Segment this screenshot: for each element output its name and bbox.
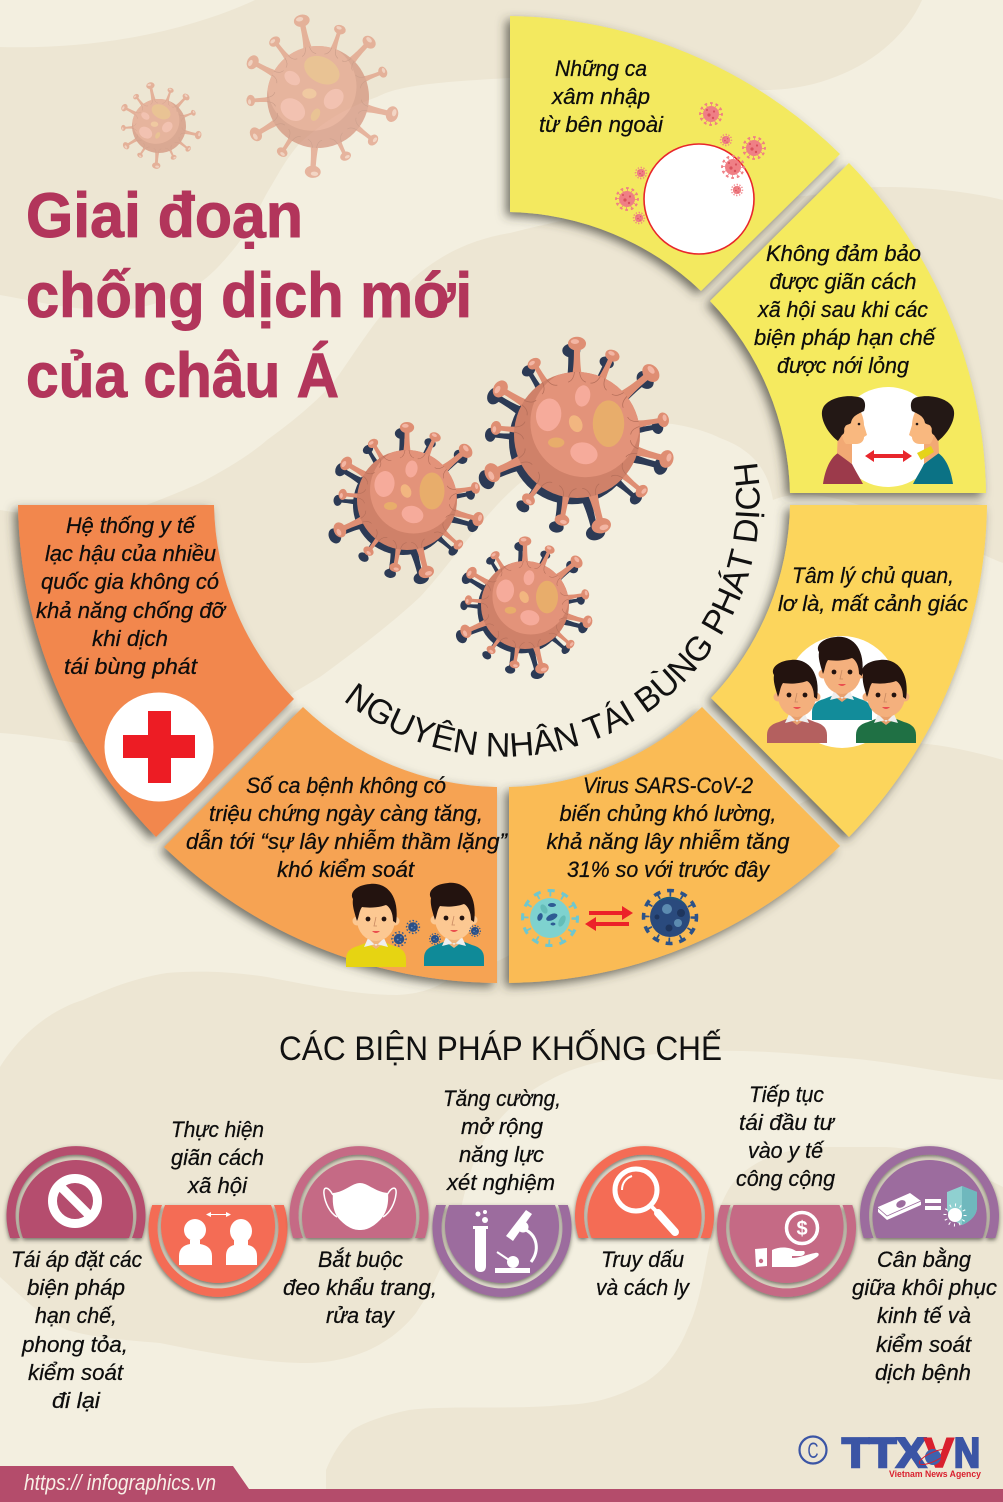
badge: rose bowl [717, 1205, 856, 1297]
text: silent infection: Số ca bệnh không có [246, 773, 446, 798]
text: economy and disease balance: Cân bằng [877, 1247, 972, 1272]
icon: face mask [324, 1183, 396, 1230]
icon: coin above hand: $ [796, 1218, 808, 1240]
text: no social distancing: được nới lỏng [777, 353, 910, 378]
icon: teal virus [522, 890, 578, 946]
panel: no social distancing [710, 163, 986, 493]
text: testing capacity: Tăng cường, [443, 1086, 561, 1111]
icon: group of three people [767, 636, 916, 748]
title: chống dịch mới [26, 261, 472, 331]
text: testing capacity: xét nghiệm [446, 1170, 555, 1195]
text: economy and disease balance: dịch bệnh [875, 1360, 971, 1385]
text: mutation: Virus SARS-CoV-2 [583, 773, 753, 798]
background blob: top wave [0, 0, 922, 310]
text: outdated health systems [36, 513, 227, 679]
measure 2: social distancing [148, 1117, 288, 1297]
text: restrictions: phong tỏa, [21, 1332, 128, 1357]
text: testing capacity [443, 1086, 561, 1195]
icon: money equals shield [878, 1186, 977, 1225]
text: economy and disease balance: giữa khôi phục [852, 1275, 997, 1300]
text: masks and hand washing: đeo khẩu trang, [283, 1275, 437, 1300]
panel: silent infection [164, 707, 509, 983]
text: economy and disease balance [852, 1247, 997, 1385]
background blob: right and lower wave [0, 743, 1003, 1363]
icon: two silhouettes with spacing arrow [179, 1212, 257, 1265]
text: complacency: lơ là, mất cảnh giác [778, 591, 968, 616]
text: economy and disease balance: kiểm soát [876, 1332, 972, 1357]
icon: navy virus [644, 890, 696, 944]
text: no social distancing: được giãn cách [770, 269, 916, 294]
icon: circle with viruses entering [616, 103, 765, 254]
icon: prohibition sign [52, 1178, 98, 1224]
icon: test tube and microscope [473, 1210, 536, 1273]
text: no social distancing [754, 241, 937, 378]
text: social distancing [171, 1117, 264, 1198]
text: restrictions: hạn chế, [35, 1303, 117, 1328]
background blob: central wave [0, 187, 1003, 790]
logo: TTXVN Vietnam News Agency: C [808, 1438, 819, 1463]
icon: magnifying glass [615, 1169, 675, 1232]
text: social distancing: xã hội [187, 1173, 248, 1198]
icon: two people with virus particles [346, 883, 484, 967]
text: public health investment: Tiếp tục [749, 1082, 824, 1107]
text: imported cases: xâm nhập [551, 84, 650, 109]
panel: imported cases [510, 16, 840, 291]
title: của châu Á [26, 341, 339, 411]
text: outdated health systems: khả năng chống đỡ [36, 598, 227, 623]
measure 3: masks and hand washing [283, 1146, 437, 1328]
panel: complacency [711, 505, 987, 837]
footer URL: https:// infographics.vn [24, 1470, 216, 1495]
text: silent infection [186, 773, 509, 882]
text: masks and hand washing: rửa tay [326, 1303, 396, 1328]
text: outdated health systems: lạc hậu của nhiều [45, 541, 216, 566]
central virus, left [326, 422, 485, 586]
text: public health investment: công cộng [736, 1166, 836, 1191]
text: silent infection: khó kiểm soát [277, 857, 415, 882]
text: tracing and isolation: Truy dấu [601, 1247, 684, 1272]
text: outdated health systems: Hệ thống y tế [66, 513, 197, 538]
text: outdated health systems: tái bùng phát [64, 654, 198, 679]
text: economy and disease balance: kinh tế và [877, 1303, 971, 1328]
badge: purple dome [860, 1146, 999, 1238]
text: testing capacity: năng lực [459, 1142, 544, 1167]
icon: exchange arrows [585, 906, 633, 931]
text: no social distancing: Không đảm bảo [766, 241, 921, 266]
text: complacency [778, 563, 968, 616]
measure 4: testing capacity [432, 1086, 572, 1297]
logo: TTXVN Vietnam News Agency: TTX [842, 1429, 926, 1476]
logo: TTXVN Vietnam News Agency: Vietnam News Agency [889, 1469, 982, 1480]
text: outdated health systems: quốc gia không có [41, 569, 219, 594]
measure 5: tracing and isolation [575, 1146, 714, 1300]
icon: red cross [104, 692, 214, 802]
background blob: bottom right wave [326, 1147, 1003, 1502]
text: imported cases [539, 56, 664, 137]
text: restrictions: đi lại [52, 1388, 101, 1413]
text: imported cases: Những ca [555, 56, 647, 81]
text: complacency: Tâm lý chủ quan, [792, 563, 954, 588]
measure 1: restrictions [6, 1146, 146, 1413]
text: no social distancing: biện pháp hạn chế [754, 325, 937, 350]
text: restrictions: biện pháp [27, 1275, 125, 1300]
heading: control measures: CÁC BIỆN PHÁP KHỐNG CHẾ [279, 1029, 722, 1068]
decorative faded virus, small [103, 69, 217, 182]
text: silent infection: triệu chứng ngày càng tăng, [209, 801, 483, 826]
decorative faded virus, large [211, 0, 427, 203]
text: restrictions: Tái áp đặt các [11, 1247, 142, 1272]
logo: TTXVN Vietnam News Agency [800, 1429, 982, 1480]
logo: TTXVN Vietnam News Agency: N [954, 1429, 980, 1476]
curved heading: causes of the resurgence: NGUYÊN NHÂN TÁI BÙNG PHÁT DỊCH [345, 464, 764, 757]
panel: outdated health systems [18, 505, 294, 837]
title: Giai đoạn [26, 181, 303, 251]
text: restrictions [11, 1247, 142, 1413]
text: masks and hand washing: Bắt buộc [318, 1247, 403, 1272]
text: mutation [546, 773, 790, 882]
text: social distancing: Thực hiện [171, 1117, 264, 1142]
badge: purple bowl [432, 1205, 572, 1297]
text: imported cases: từ bên ngoài [539, 112, 664, 137]
text: tracing and isolation: và cách ly [596, 1275, 691, 1300]
icon: coin above hand [755, 1212, 819, 1267]
icon: two people at a distance [822, 387, 954, 487]
text: silent infection: dẫn tới “sự lây nhiễm thầm lặng” [186, 829, 509, 854]
badge: maroon dome [6, 1146, 146, 1238]
text: restrictions: kiểm soát [28, 1360, 124, 1385]
measure 6: public health investment [717, 1082, 856, 1297]
badge: coral bowl [148, 1205, 288, 1297]
text: social distancing: giãn cách [171, 1145, 264, 1170]
text: outdated health systems: khi dịch [92, 626, 168, 651]
footer band [0, 1466, 1003, 1502]
text: public health investment: tái đầu tư [739, 1110, 836, 1135]
text: tracing and isolation [596, 1247, 691, 1300]
text: public health investment [736, 1082, 836, 1191]
central virus, lower [454, 536, 594, 680]
text: testing capacity: mở rộng [461, 1114, 544, 1139]
logo: TTXVN Vietnam News Agency: V [924, 1429, 954, 1476]
text: mutation: 31% so với trước đây [567, 857, 771, 882]
text: mutation: khả năng lây nhiễm tăng [546, 829, 790, 854]
badge: coral dome [575, 1146, 714, 1238]
text: no social distancing: xã hội sau khi các [757, 297, 928, 322]
title [26, 181, 472, 411]
panel: SARS-CoV-2 mutation [509, 707, 840, 983]
badge: rose dome [290, 1146, 428, 1238]
text: public health investment: vào y tế [748, 1138, 825, 1163]
central virus, large [476, 337, 675, 542]
measure 7: economy and disease balance [852, 1146, 999, 1385]
text: mutation: biến chủng khó lường, [560, 801, 776, 826]
text: masks and hand washing [283, 1247, 437, 1328]
